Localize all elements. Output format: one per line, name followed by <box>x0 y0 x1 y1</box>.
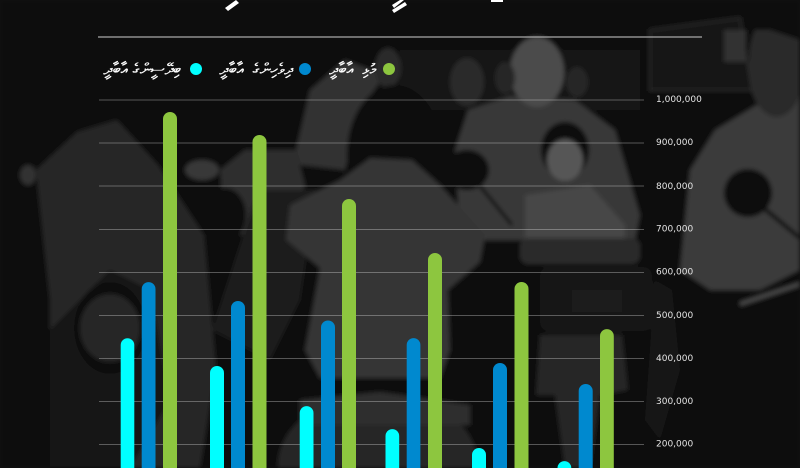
legend <box>103 60 395 80</box>
y axis labels: 500,000 <box>656 311 693 321</box>
bars: group 3 <box>300 199 356 468</box>
title (clipped at top edge) <box>225 0 503 13</box>
grid lines <box>99 100 644 444</box>
y axis labels: 300,000 <box>656 397 693 407</box>
bars: group 6 <box>558 329 614 468</box>
legend item: total population <box>329 60 395 80</box>
header divider <box>98 36 702 38</box>
y axis labels: 700,000 <box>656 224 693 234</box>
y axis labels <box>656 95 702 450</box>
y axis labels: 600,000 <box>656 268 693 278</box>
y axis labels: 800,000 <box>656 182 693 192</box>
bars: group 4 <box>386 253 442 468</box>
bar chart <box>99 95 702 468</box>
bars: group 2 <box>210 135 266 468</box>
legend item: total population: މުޅި އާބާދީ <box>329 60 377 80</box>
bars: group 1 <box>121 112 177 468</box>
y axis labels: 400,000 <box>656 354 693 364</box>
legend item: Maldivian population: ދިވެހިންގެ އާބާދީ <box>219 60 294 80</box>
bars: group 5 <box>472 282 528 468</box>
y axis labels: 1,000,000 <box>656 95 702 105</box>
legend item: foreign population: ބިދޭސީންގެ އާބާދީ <box>103 60 181 80</box>
y axis labels: 900,000 <box>656 138 693 148</box>
y axis labels: 200,000 <box>656 440 693 450</box>
